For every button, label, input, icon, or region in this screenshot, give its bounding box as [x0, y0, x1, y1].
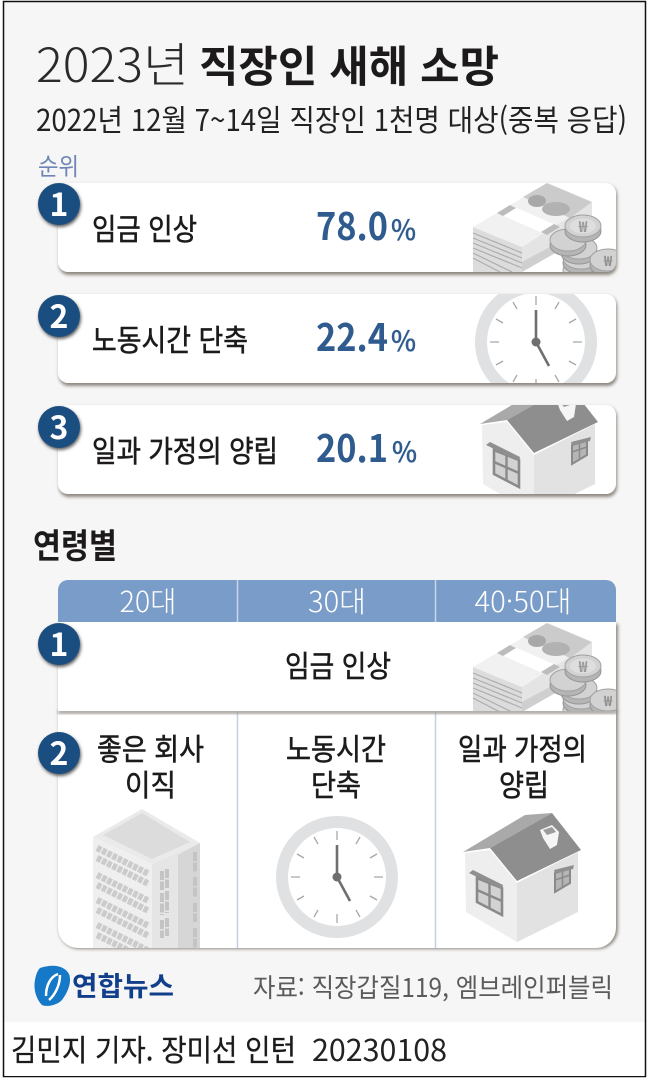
- column 3 label: 양립: [499, 761, 549, 805]
- logo: Yonhap News: 연합뉴스: [72, 965, 174, 1004]
- column 1 label: 좋은 회사: [97, 725, 204, 769]
- value: 22.4%: %: [391, 320, 416, 360]
- column 2 label: [286, 725, 386, 805]
- badge: age rank 2: 2: [50, 729, 68, 775]
- value: 20.1%: 20.1: [316, 418, 388, 473]
- table header: 30대: [308, 579, 366, 621]
- label: shorter working hours: 노동시간 단축: [92, 316, 248, 360]
- rank label: 순위: [38, 147, 79, 182]
- logo: Yonhap News: [34, 965, 174, 1006]
- title: 직장인 새해 소망: [199, 33, 499, 95]
- value: 22.4%: 22.4: [316, 307, 388, 362]
- badge: rank 3: [38, 403, 81, 450]
- column 3 label: [458, 725, 587, 805]
- badge: rank 3: 3: [50, 403, 68, 449]
- footer strip: [4, 1022, 644, 1076]
- row 1 label: 임금 인상: [285, 642, 391, 686]
- column 2 label: 노동시간: [286, 725, 386, 769]
- panel: age table: [58, 579, 626, 961]
- badge: rank 1: [38, 180, 81, 227]
- table header: 40·50대: [474, 579, 572, 621]
- panel: rank 2: [56, 294, 620, 388]
- row 1 shadow: [58, 710, 617, 714]
- table header: [58, 579, 616, 622]
- label: work-family balance: 일과 가정의 양립: [92, 427, 278, 471]
- panel: rank 3: [56, 404, 620, 500]
- label: wage increase: 임금 인상: [92, 205, 197, 249]
- column 1 label: 이직: [125, 761, 176, 805]
- badge: rank 1: 1: [50, 180, 68, 226]
- source note: 자료: 직장갑질119, 엠브레인퍼블릭: [253, 968, 613, 1005]
- credit: 20230108: [312, 1026, 447, 1070]
- title: [36, 27, 499, 96]
- table header: 20대: [120, 579, 176, 621]
- badge: rank 2: [38, 292, 81, 339]
- icon: money small: [472, 623, 616, 711]
- heading: by age: 연령별: [33, 519, 117, 568]
- title: 2023년: [36, 27, 189, 96]
- icon: clock: [475, 294, 597, 383]
- credit: 김민지 기자. 장미선 인턴: [11, 1026, 296, 1070]
- icon: clock small: [276, 816, 398, 938]
- icon: office building: [93, 809, 200, 961]
- badge: rank 2: 2: [50, 292, 68, 338]
- column 3 label: 일과 가정의: [458, 725, 587, 769]
- icon: house: [480, 405, 598, 494]
- value: 20.1%: %: [392, 431, 417, 471]
- value: 78.0%: 78.0: [316, 196, 388, 251]
- icon: money: [472, 183, 616, 272]
- badge: age rank 2: [38, 729, 81, 776]
- badge: age rank 1: 1: [50, 620, 68, 666]
- panel: rank 1: [58, 183, 626, 286]
- value: 78.0%: %: [391, 209, 416, 249]
- icon: house small: [463, 813, 581, 942]
- column 2 label: 단축: [311, 761, 361, 805]
- column 1 label: [97, 725, 204, 805]
- badge: age rank 1: [38, 620, 81, 667]
